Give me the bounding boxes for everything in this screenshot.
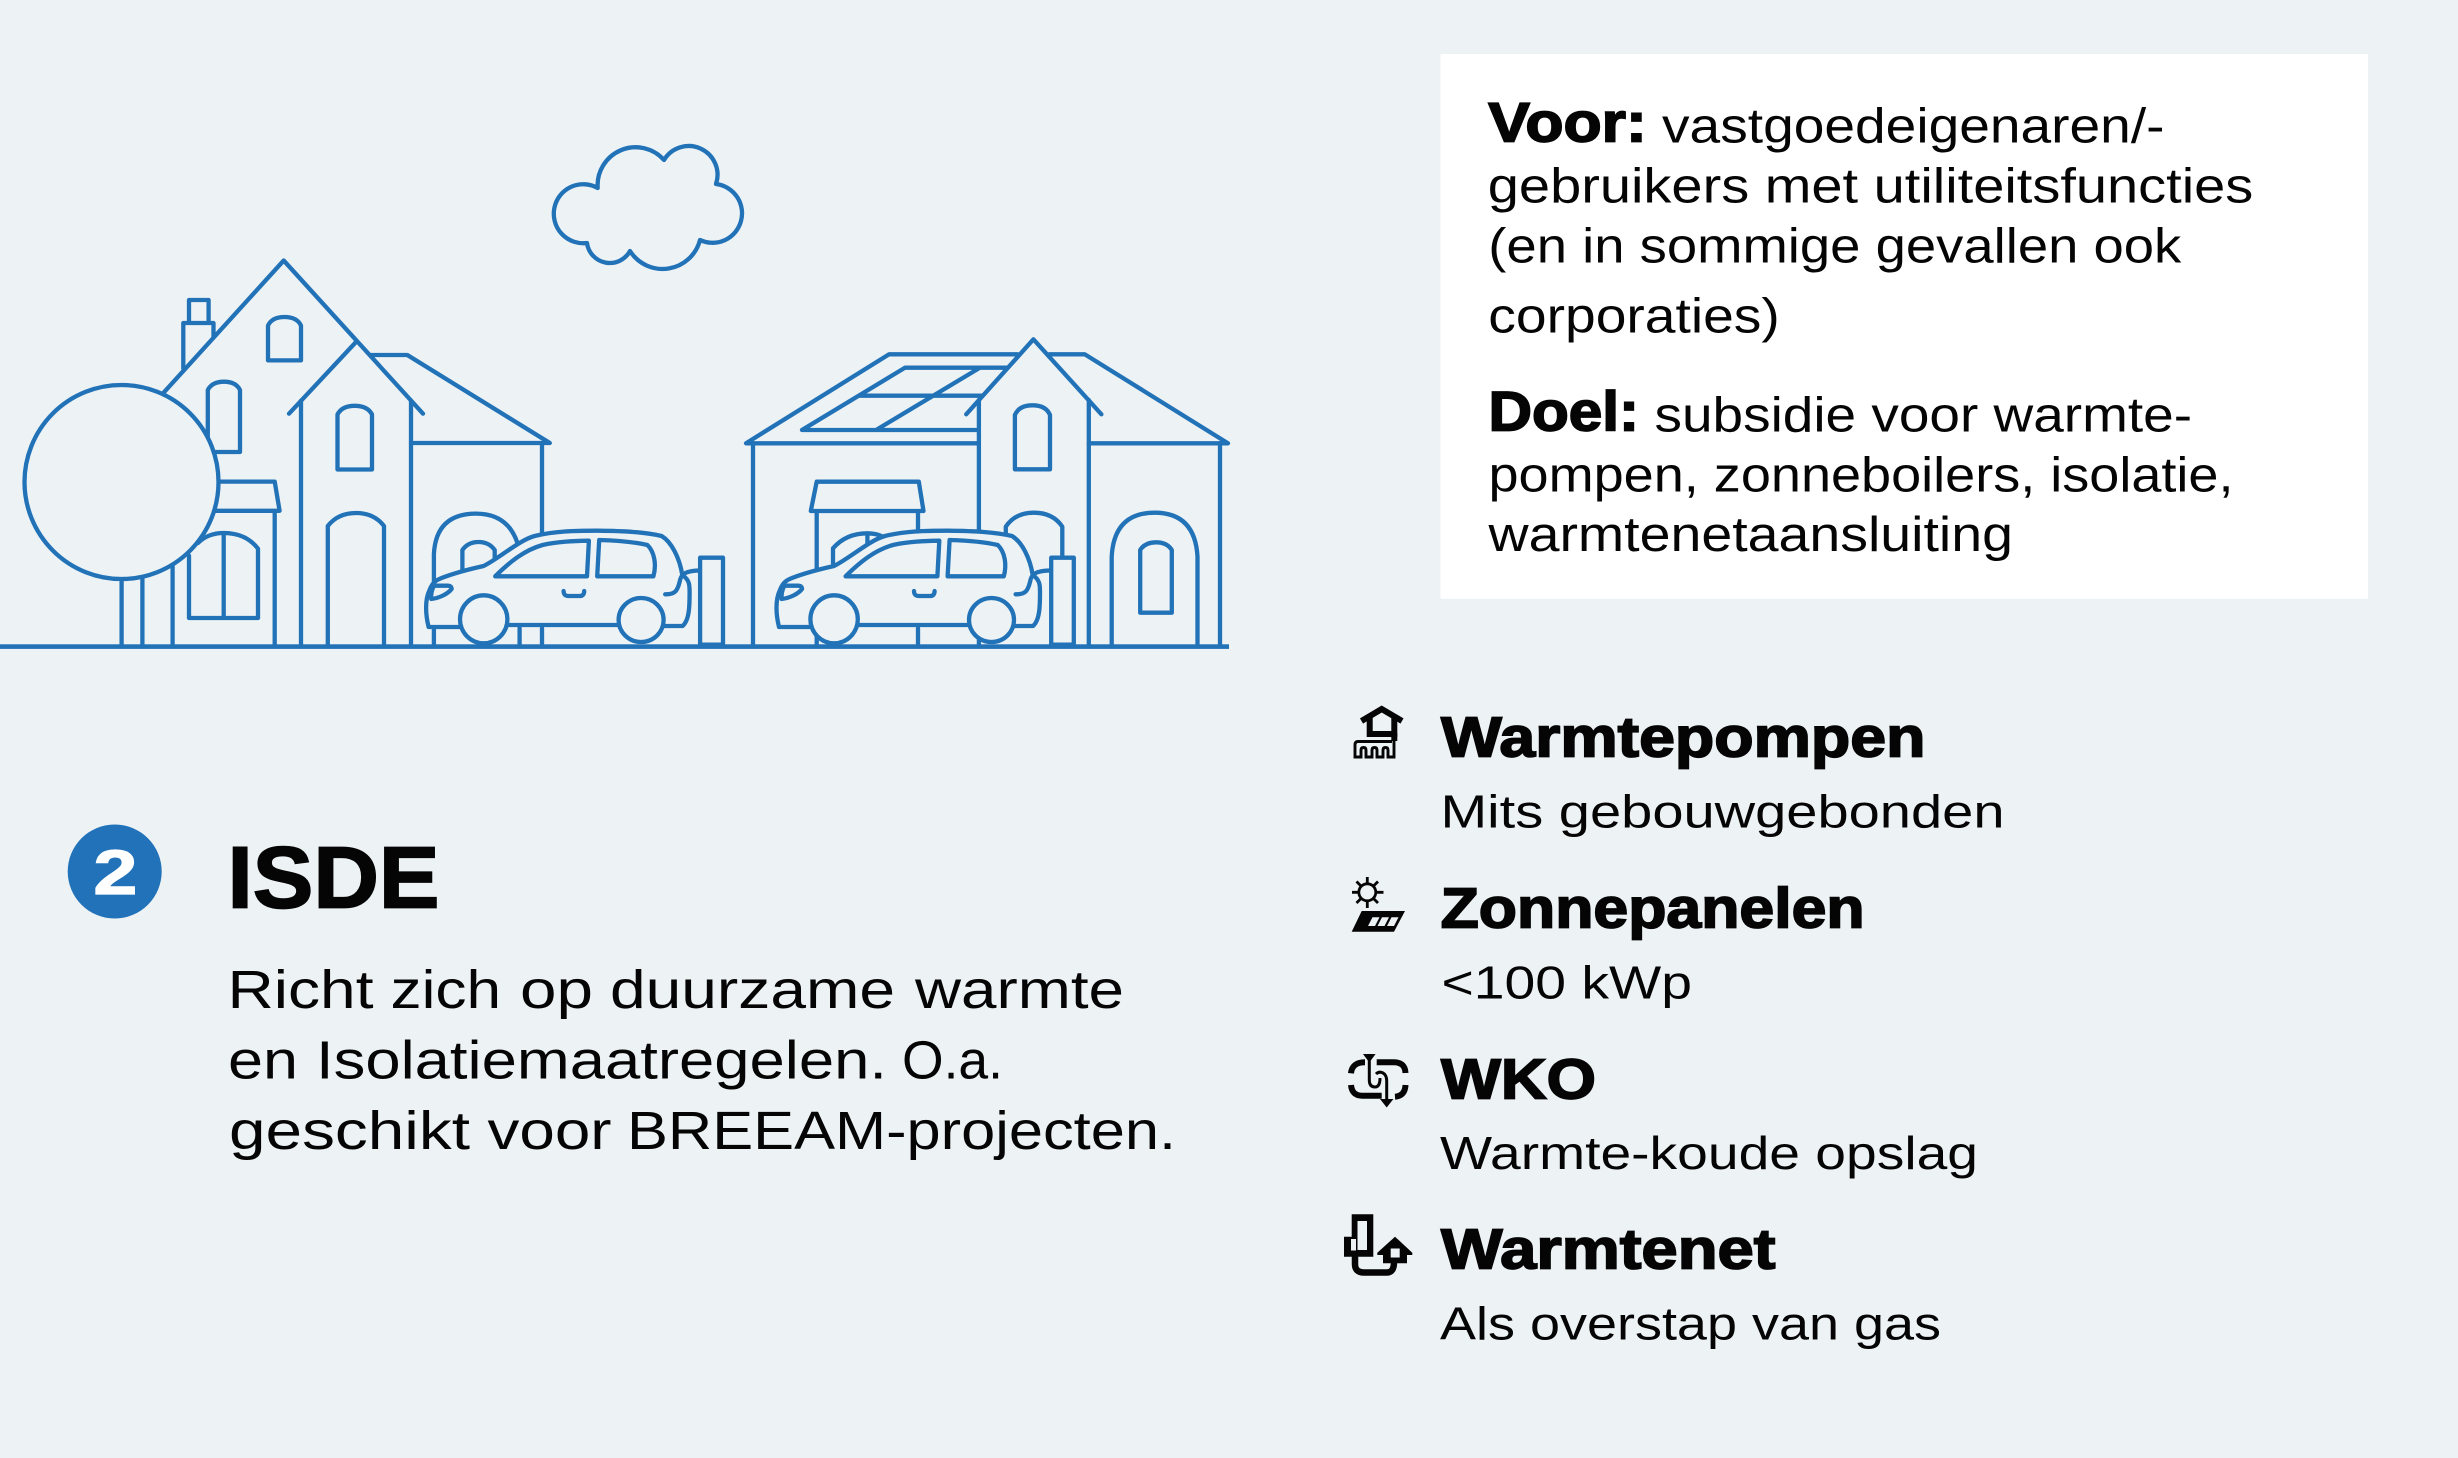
panel: target group and goal	[1440, 54, 2368, 599]
text block: description: op	[520, 960, 593, 1020]
text: Doel: subsidie voor warmte-	[1654, 389, 2192, 443]
item: Warmtenet: Warmtenet	[1441, 1217, 1776, 1281]
text: Doel	[1487, 380, 2234, 562]
ground line	[0, 644, 1229, 649]
item: WKO	[1440, 1048, 1978, 1179]
text block: description: warmte	[914, 960, 1124, 1020]
icon: heat pump house	[1355, 709, 1402, 757]
text block: description: geschikt	[229, 1101, 470, 1161]
item: WKO: WKO	[1441, 1048, 1596, 1112]
text block: description: en	[228, 1031, 298, 1091]
item: Warmtepompen: Warmtepompen	[1441, 706, 1926, 770]
right house	[746, 339, 1228, 645]
text block: description: zich	[390, 960, 501, 1020]
text: Voor: vastgoedeigenaren/-	[1662, 100, 2164, 154]
tree	[24, 385, 218, 645]
charger post right	[1051, 558, 1074, 645]
text: Voor	[1488, 91, 2253, 344]
number badge	[68, 824, 162, 918]
title: ISDE	[228, 829, 440, 926]
illustration: houses, tree and cars	[0, 146, 1229, 649]
car right	[776, 531, 1049, 643]
text block: description: Isolatiemaatregelen.	[316, 1031, 887, 1091]
text block: description: O.a.	[902, 1031, 1003, 1091]
text block: description: duurzame	[610, 960, 895, 1020]
item: WKO: Warmte-koude opslag	[1440, 1127, 1978, 1179]
car left	[426, 531, 699, 643]
text: Voor: Voor:	[1488, 91, 1647, 154]
item: Warmtenet	[1440, 1217, 1941, 1350]
text: Voor: corporaties)	[1488, 290, 1780, 344]
text: Voor: gebruikers met utiliteitsfuncties	[1488, 160, 2253, 214]
text block: description: voor	[488, 1101, 612, 1161]
icon: cloud	[554, 146, 742, 269]
text: Voor: (en in sommige gevallen ook	[1488, 220, 2182, 274]
icon: heat network	[1344, 1214, 1412, 1272]
text block: description: Richt	[228, 960, 374, 1020]
text: Doel: pompen, zonneboilers, isolatie,	[1488, 449, 2234, 503]
charger post left	[700, 558, 723, 645]
left house	[162, 260, 550, 645]
text block: description	[228, 960, 1176, 1161]
item: Warmtenet: Als overstap van gas	[1440, 1298, 1941, 1350]
text: Doel: Doel:	[1488, 380, 1639, 443]
item: Warmtepompen: Mits gebouwgebonden	[1440, 785, 2004, 837]
item: Zonnepanelen: Zonnepanelen	[1441, 877, 1865, 941]
text: Doel: warmtenetaansluiting	[1487, 508, 2013, 562]
icon: sun and solar panel	[1352, 877, 1405, 932]
number badge: 2	[93, 838, 137, 908]
item: Zonnepanelen	[1441, 877, 1865, 1008]
item: Zonnepanelen: <100 kWp	[1442, 956, 1692, 1008]
text block: description: BREEAM-projecten.	[627, 1101, 1176, 1161]
item: Warmtepompen	[1440, 706, 2004, 837]
icon: thermal storage arrows	[1351, 1054, 1406, 1108]
